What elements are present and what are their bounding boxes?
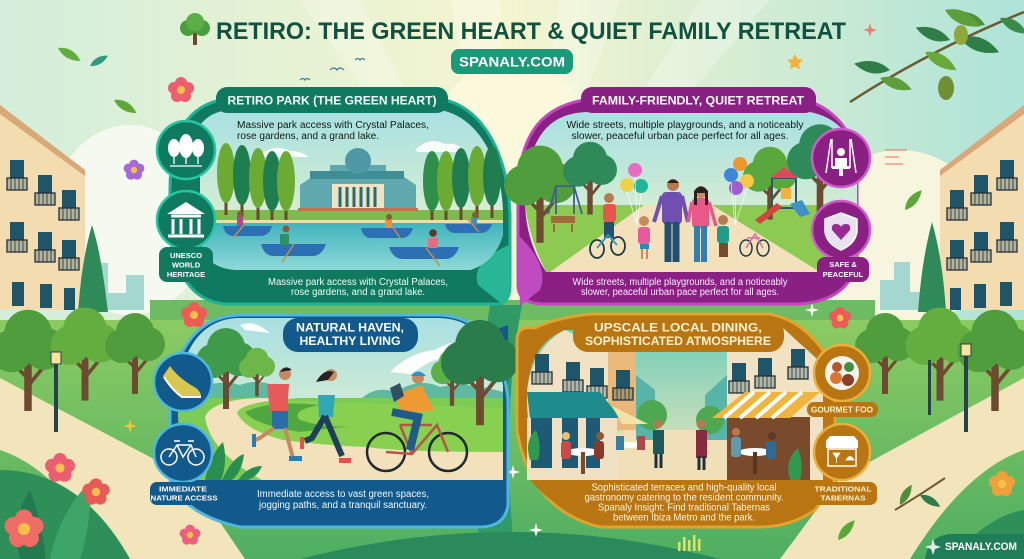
street scene xyxy=(527,325,823,480)
panel frame xyxy=(170,315,508,527)
heading text: RETIRO: THE GREEN HEART & QUIET FAMILY RETREAT xyxy=(216,18,846,45)
icon: title tree xyxy=(180,13,210,45)
caption xyxy=(268,277,448,298)
caption xyxy=(257,489,429,511)
banner xyxy=(283,318,418,352)
jogging scene xyxy=(178,318,519,480)
icon: swing xyxy=(812,129,870,187)
icon: shield xyxy=(812,201,870,259)
swing set xyxy=(548,186,582,214)
caption: rose gardens, and a grand lake. xyxy=(291,287,425,298)
icon: bicycle xyxy=(154,424,212,482)
label: traditional tabernas: TABERNAS xyxy=(820,494,866,502)
foliage and flowers: bottom left xyxy=(4,302,207,559)
caption: Sophisticated terraces and high-quality local xyxy=(592,482,776,494)
icon: running shoe xyxy=(154,353,212,411)
label: UNESCO xyxy=(159,247,213,282)
label: safe and peaceful: SAFE & xyxy=(829,260,857,269)
park family scene xyxy=(504,112,857,272)
caption band xyxy=(530,480,830,525)
diners and waiters xyxy=(528,420,802,480)
mini bar chart decoration xyxy=(678,535,700,551)
playground xyxy=(755,167,810,224)
panel frame xyxy=(170,99,510,304)
olive branch: top right xyxy=(850,4,1024,102)
foliage: bottom right xyxy=(835,471,1015,543)
intro text: Massive park access with Crystal Palaces, xyxy=(237,120,429,131)
family xyxy=(590,179,769,262)
rowing boats xyxy=(223,224,492,259)
website pill: SPANALY.COM xyxy=(459,54,565,70)
brand mark: bottom right xyxy=(925,534,1024,559)
icon: gourmet food xyxy=(814,345,870,401)
panel frame xyxy=(518,99,857,304)
street trees: right xyxy=(855,307,1024,432)
caption: gastronomy catering to the resident community. xyxy=(584,492,784,504)
caption: Spanaly Insight: Find traditional Tabernas xyxy=(598,502,770,514)
joggers xyxy=(252,367,351,463)
awnings xyxy=(527,392,820,480)
website pill xyxy=(451,49,573,74)
caption: between Ibiza Metro and the park. xyxy=(613,512,755,524)
banner xyxy=(581,87,816,113)
panel: Retiro Park xyxy=(157,87,510,305)
decorative leaves and flowers: top xyxy=(56,44,925,328)
panel frame xyxy=(517,314,835,527)
icon: trees xyxy=(157,121,215,179)
label: safe and peaceful: PEACEFUL xyxy=(823,270,864,279)
caption: slower, peaceful urban pace perfect for all ages. xyxy=(581,287,779,298)
banner: HEALTHY LIVING xyxy=(300,336,401,348)
banner: SOPHISTICATED ATMOSPHERE xyxy=(585,336,771,348)
panel: Natural haven xyxy=(150,315,519,527)
cyclist xyxy=(367,372,467,471)
caption: Massive park access with Crystal Palaces, xyxy=(268,277,448,288)
building: right xyxy=(918,105,1024,312)
rowers xyxy=(233,211,479,266)
bench xyxy=(551,216,575,232)
icon: tavern xyxy=(814,424,870,480)
label: immediate nature access xyxy=(150,482,218,505)
label: UNESCO: WORLD xyxy=(172,260,201,270)
caption: Wide streets, multiple playgrounds, and a noticeably xyxy=(572,277,788,288)
label: safe and peaceful xyxy=(817,257,869,282)
banner: UPSCALE LOCAL DINING, xyxy=(594,322,762,334)
label: traditional tabernas: TRADITIONAL xyxy=(814,484,872,494)
intro text: Wide streets, multiple playgrounds, and a noticeably xyxy=(566,120,804,131)
intro text: slower, peaceful urban pace perfect for all ages. xyxy=(572,131,788,142)
label: UNESCO: HERITAGE xyxy=(167,270,205,279)
title xyxy=(180,13,846,45)
label: UNESCO: UNESCO xyxy=(170,251,202,260)
building: left xyxy=(0,105,108,312)
panel: Upscale dining xyxy=(517,314,878,527)
caption xyxy=(572,277,788,298)
banner xyxy=(573,318,784,352)
caption xyxy=(584,482,784,524)
brand mark: bottom right: SPANALY.COM xyxy=(945,541,1017,553)
crystal palace xyxy=(298,148,418,211)
label: immediate nature access: NATURE ACCESS xyxy=(150,494,218,502)
sparkles xyxy=(123,23,877,537)
caption: Immediate access to vast green spaces, xyxy=(257,489,429,500)
banner xyxy=(216,87,448,113)
intro text xyxy=(566,120,804,142)
banner: RETIRO PARK (THE GREEN HEART) xyxy=(228,94,437,108)
intro text: rose gardens, and a grand lake. xyxy=(237,131,379,142)
windows and balconies xyxy=(532,349,808,400)
label: traditional tabernas xyxy=(812,482,877,505)
label: gourmet food xyxy=(807,402,878,417)
label: gourmet food: GOURMET FOO xyxy=(811,406,873,414)
lake scene xyxy=(200,110,503,270)
caption: jogging paths, and a tranquil sanctuary. xyxy=(258,500,427,511)
panel: Family-friendly xyxy=(504,87,870,306)
label: immediate nature access: IMMEDIATE xyxy=(159,484,207,494)
street trees: left xyxy=(0,307,165,432)
caption band xyxy=(172,480,503,525)
banner: NATURAL HAVEN, xyxy=(296,322,404,334)
icon: heritage building xyxy=(157,191,215,249)
banner: FAMILY-FRIENDLY, QUIET RETREAT xyxy=(592,94,805,108)
balloons xyxy=(620,157,754,225)
intro text xyxy=(237,120,429,142)
